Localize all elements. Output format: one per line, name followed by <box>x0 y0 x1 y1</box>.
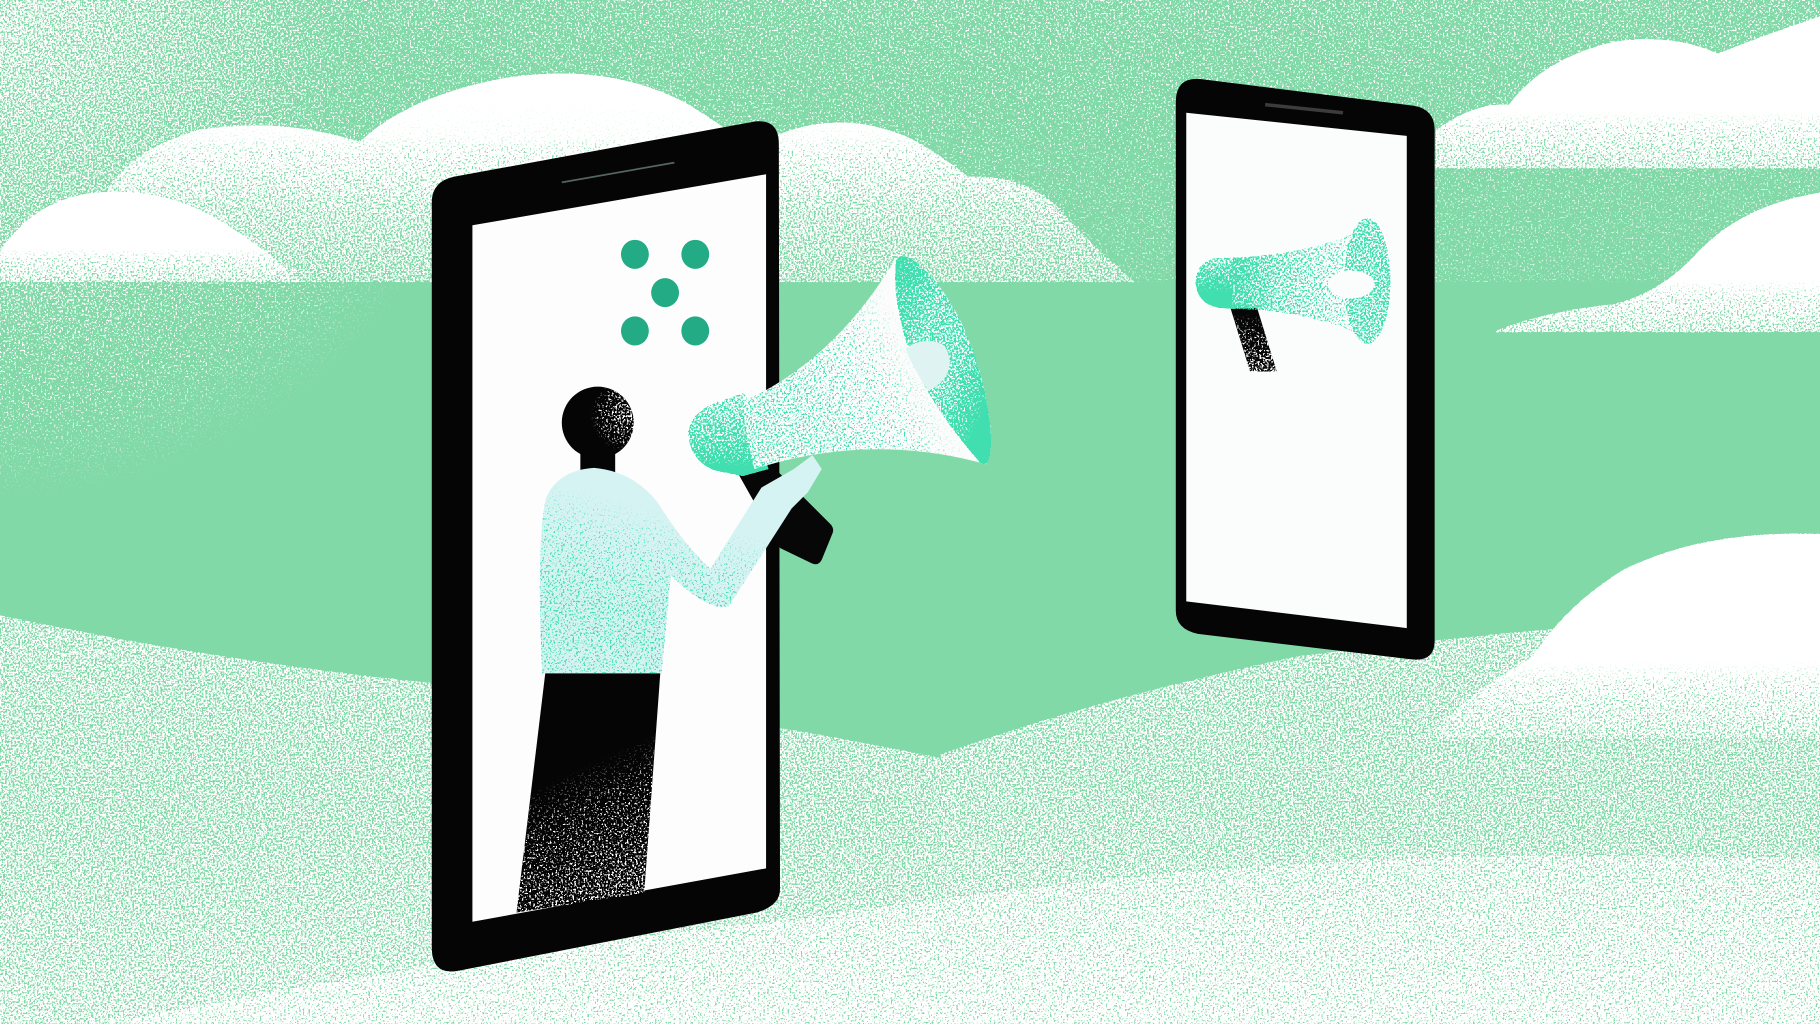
phone body <box>1176 79 1435 660</box>
phone speaker line <box>562 163 674 182</box>
phone screen <box>1186 113 1407 628</box>
clouds: upper right <box>1436 16 1820 168</box>
large megaphone <box>688 256 991 476</box>
person torso and arm <box>540 455 822 673</box>
sky grain <box>0 0 1820 580</box>
horn <box>743 258 987 469</box>
phone body <box>432 121 780 972</box>
hills: foreground <box>104 856 1820 1024</box>
clapper <box>1328 271 1374 298</box>
hills: left <box>0 615 1820 1024</box>
cloud: lower right <box>1428 534 1820 738</box>
small megaphone <box>1196 218 1391 372</box>
megaphone handle <box>738 464 833 564</box>
person legs <box>517 671 660 912</box>
handle <box>1230 308 1277 372</box>
mouth <box>1344 218 1391 344</box>
horn <box>1232 232 1360 334</box>
person head and neck <box>562 387 634 473</box>
phone screen <box>472 174 766 922</box>
large phone <box>432 121 780 972</box>
phone speaker line <box>1265 105 1343 113</box>
cap <box>1196 258 1233 309</box>
mouth highlight <box>905 341 950 391</box>
horn mouth <box>895 256 991 464</box>
clouds: back left bank <box>0 73 1135 282</box>
clouds: middle right <box>1493 193 1820 332</box>
small phone <box>1176 79 1435 660</box>
hills: far right <box>940 604 1820 1024</box>
cap <box>688 392 768 476</box>
dots on the screen <box>621 240 709 345</box>
